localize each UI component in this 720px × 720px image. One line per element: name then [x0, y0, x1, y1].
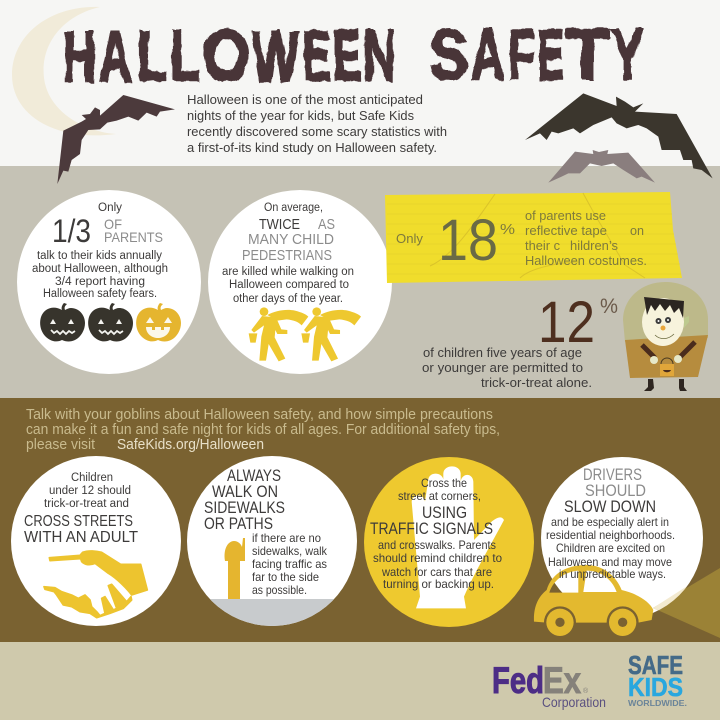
text: drivers tip [546, 466, 675, 581]
text: cross with an adult: Children [71, 472, 113, 484]
logo: FedEx Corporation: ® [583, 687, 589, 695]
title: E [302, 17, 331, 96]
text: tape statistic: hildren’s [570, 239, 618, 253]
text: pedestrian statistic [222, 202, 354, 305]
text: stat 1/3 of parents: OF [104, 216, 122, 232]
title: O [203, 17, 250, 96]
icon: grey bat [548, 150, 655, 183]
title: E [333, 17, 361, 96]
text: pedestrian statistic: MANY CHILD [248, 231, 334, 248]
headlight beam on circle [654, 586, 687, 610]
logo: FedEx Corporation: Corporation [542, 694, 606, 710]
icon: left bat [57, 95, 175, 184]
title: T [566, 16, 610, 95]
text: drivers tip: SLOW DOWN [564, 498, 656, 516]
text: traffic signals tip: should remind children to [373, 551, 502, 565]
text: stat 1/3 of parents: Halloween safety fears. [43, 288, 157, 300]
text: drivers tip: SHOULD [585, 482, 646, 500]
icon: child in costume [623, 282, 708, 391]
text: tape statistic [396, 208, 647, 273]
icon: yellow car [534, 565, 653, 638]
title: S [430, 16, 468, 95]
text: stat 1/3 of parents: 3/4 report having [55, 276, 145, 288]
text: pedestrian statistic: are killed while walking on [222, 266, 354, 278]
logo: FedEx Corporation [492, 660, 606, 710]
text: 12 percent statistic: % [600, 295, 618, 318]
logo: Safe Kids Worldwide: SAFE [628, 650, 683, 680]
brown tips band [0, 398, 720, 642]
tips introduction text: can make it a fun and safe night for kids of all ages. For additional safety tips, [26, 422, 500, 438]
title: L [170, 17, 200, 96]
tips introduction text: please visit [26, 437, 95, 453]
sidewalk [210, 599, 334, 626]
text: 12 percent statistic: of children five years of age [423, 345, 582, 360]
text: traffic signals tip: TRAFFIC SIGNALS [370, 519, 493, 538]
panel: yellow tape 18 percent [385, 192, 682, 283]
title: H [63, 18, 96, 97]
title: W [252, 18, 299, 97]
text: drivers tip: in unpredictable ways. [559, 567, 666, 581]
text: traffic signals tip: USING [422, 503, 467, 522]
text: tape statistic: 18 [438, 208, 498, 273]
text: tape statistic: their c [525, 239, 560, 253]
title: N [363, 17, 396, 96]
text: drivers tip: and be especially alert in [551, 515, 669, 529]
text: sidewalks tip: WALK ON [212, 482, 278, 501]
text: cross with an adult: under 12 should [49, 485, 131, 497]
panel: walk on sidewalks [187, 456, 357, 629]
text: 12 percent statistic [422, 290, 618, 390]
text: stat 1/3 of parents: Only [98, 202, 122, 214]
intro text: recently discovered some scary statistics with [187, 124, 447, 139]
headlight beam [653, 568, 720, 638]
text: pedestrian statistic: TWICE [259, 216, 300, 233]
logo: Safe Kids Worldwide: WORLDWIDE. [628, 699, 687, 708]
text: tape statistic: Only [396, 232, 424, 246]
text: drivers tip: residential neighborhoods. [546, 528, 675, 542]
logo: Safe Kids Worldwide [628, 650, 687, 708]
intro text: a first-of-its kind study on Halloween safety. [187, 140, 437, 155]
text: traffic signals tip: street at corners, [398, 489, 481, 503]
text: drivers tip: Children are excited on [556, 541, 665, 555]
text: drivers tip: DRIVERS [583, 466, 642, 484]
intro text: Halloween is one of the most anticipated [187, 92, 423, 107]
text: cross with an adult: WITH AN ADULT [24, 529, 138, 546]
text: stat 1/3 of parents [32, 202, 168, 300]
title: A [471, 16, 504, 95]
text: cross with an adult: trick-or-treat and [44, 498, 129, 510]
text: stat 1/3 of parents: about Halloween, although [32, 263, 168, 275]
icon: right bat [525, 93, 713, 178]
text: sidewalks tip: sidewalks, walk [252, 544, 328, 558]
text: traffic signals tip [370, 476, 502, 591]
text: cross with an adult: CROSS STREETS [24, 513, 133, 530]
panel: one third of parents [17, 190, 201, 374]
text: sidewalks tip [204, 466, 328, 597]
text: traffic signals tip: watch for cars that are [381, 565, 492, 579]
text: pedestrian statistic: other days of the year. [233, 293, 343, 305]
top background [0, 0, 720, 166]
logo: FedEx Corporation: Ex [543, 660, 581, 701]
text: 12 percent statistic: trick-or-treat alone. [481, 375, 592, 390]
tips introduction text: Talk with your goblins about Halloween safety, and how simple precautions [26, 407, 493, 423]
text: stat 1/3 of parents: talk to their kids annually [37, 250, 162, 262]
tips introduction text [26, 407, 500, 453]
text: traffic signals tip: turning or backing up. [383, 577, 494, 591]
text: sidewalks tip: OR PATHS [204, 514, 273, 533]
icon: handshake [44, 551, 147, 618]
title: L [137, 17, 167, 96]
logo: FedEx Corporation: Fed [492, 660, 544, 701]
text: traffic signals tip: and crosswalks. Parents [378, 538, 496, 552]
panel: twice as many pedestrians [208, 190, 392, 374]
text: drivers tip: Halloween and may move [548, 555, 672, 569]
text: tape statistic: on [630, 224, 644, 238]
text: sidewalks tip: if there are no [252, 531, 321, 545]
text: 12 percent statistic: or younger are permitted to [422, 360, 583, 375]
tape strip [385, 192, 682, 283]
footer band [0, 642, 720, 720]
text: sidewalks tip: SIDEWALKS [204, 498, 285, 517]
tips introduction text: SafeKids.org/Halloween [117, 437, 264, 453]
panel: drivers slow down [534, 457, 720, 638]
text: pedestrian statistic: PEDESTRIANS [242, 247, 332, 264]
text: sidewalks tip: facing traffic as [252, 557, 327, 571]
text: stat 1/3 of parents: PARENTS [104, 229, 163, 245]
text: 12 percent statistic: 12 [538, 290, 595, 355]
text: pedestrian statistic: AS [318, 216, 335, 233]
title [63, 16, 644, 97]
icon: walking person [225, 538, 245, 599]
text: sidewalks tip: as possible. [252, 583, 307, 597]
taupe statistics band [0, 166, 720, 398]
title: Y [611, 16, 644, 95]
text: traffic signals tip: Cross the [421, 476, 467, 490]
text: tape statistic: reflective tape [525, 224, 607, 238]
panel: cross with an adult [11, 456, 181, 626]
text: tape statistic: of parents use [525, 209, 606, 223]
panel: traffic signals [364, 457, 534, 627]
icon: white stop hand [412, 466, 504, 608]
text: tape statistic: Halloween costumes. [525, 254, 647, 268]
text: tape statistic: % [500, 221, 515, 238]
text: sidewalks tip: ALWAYS [227, 466, 281, 485]
title: E [537, 16, 564, 95]
text: pedestrian statistic: On average, [264, 202, 323, 214]
text: cross with an adult [24, 472, 138, 546]
icon: walking children with capes [249, 307, 361, 361]
icon: crescent moon [12, 7, 116, 135]
intro text [187, 92, 447, 155]
title: F [508, 16, 535, 95]
text: pedestrian statistic: Halloween compared to [229, 279, 349, 291]
text: stat 1/3 of parents: 1/3 [52, 213, 91, 249]
title: A [99, 18, 132, 97]
icon: three pumpkins [40, 303, 181, 342]
intro text: nights of the year for kids, but Safe Kids [187, 108, 414, 123]
text: sidewalks tip: far to the side [252, 570, 319, 584]
logo: Safe Kids Worldwide: KIDS [628, 672, 683, 702]
